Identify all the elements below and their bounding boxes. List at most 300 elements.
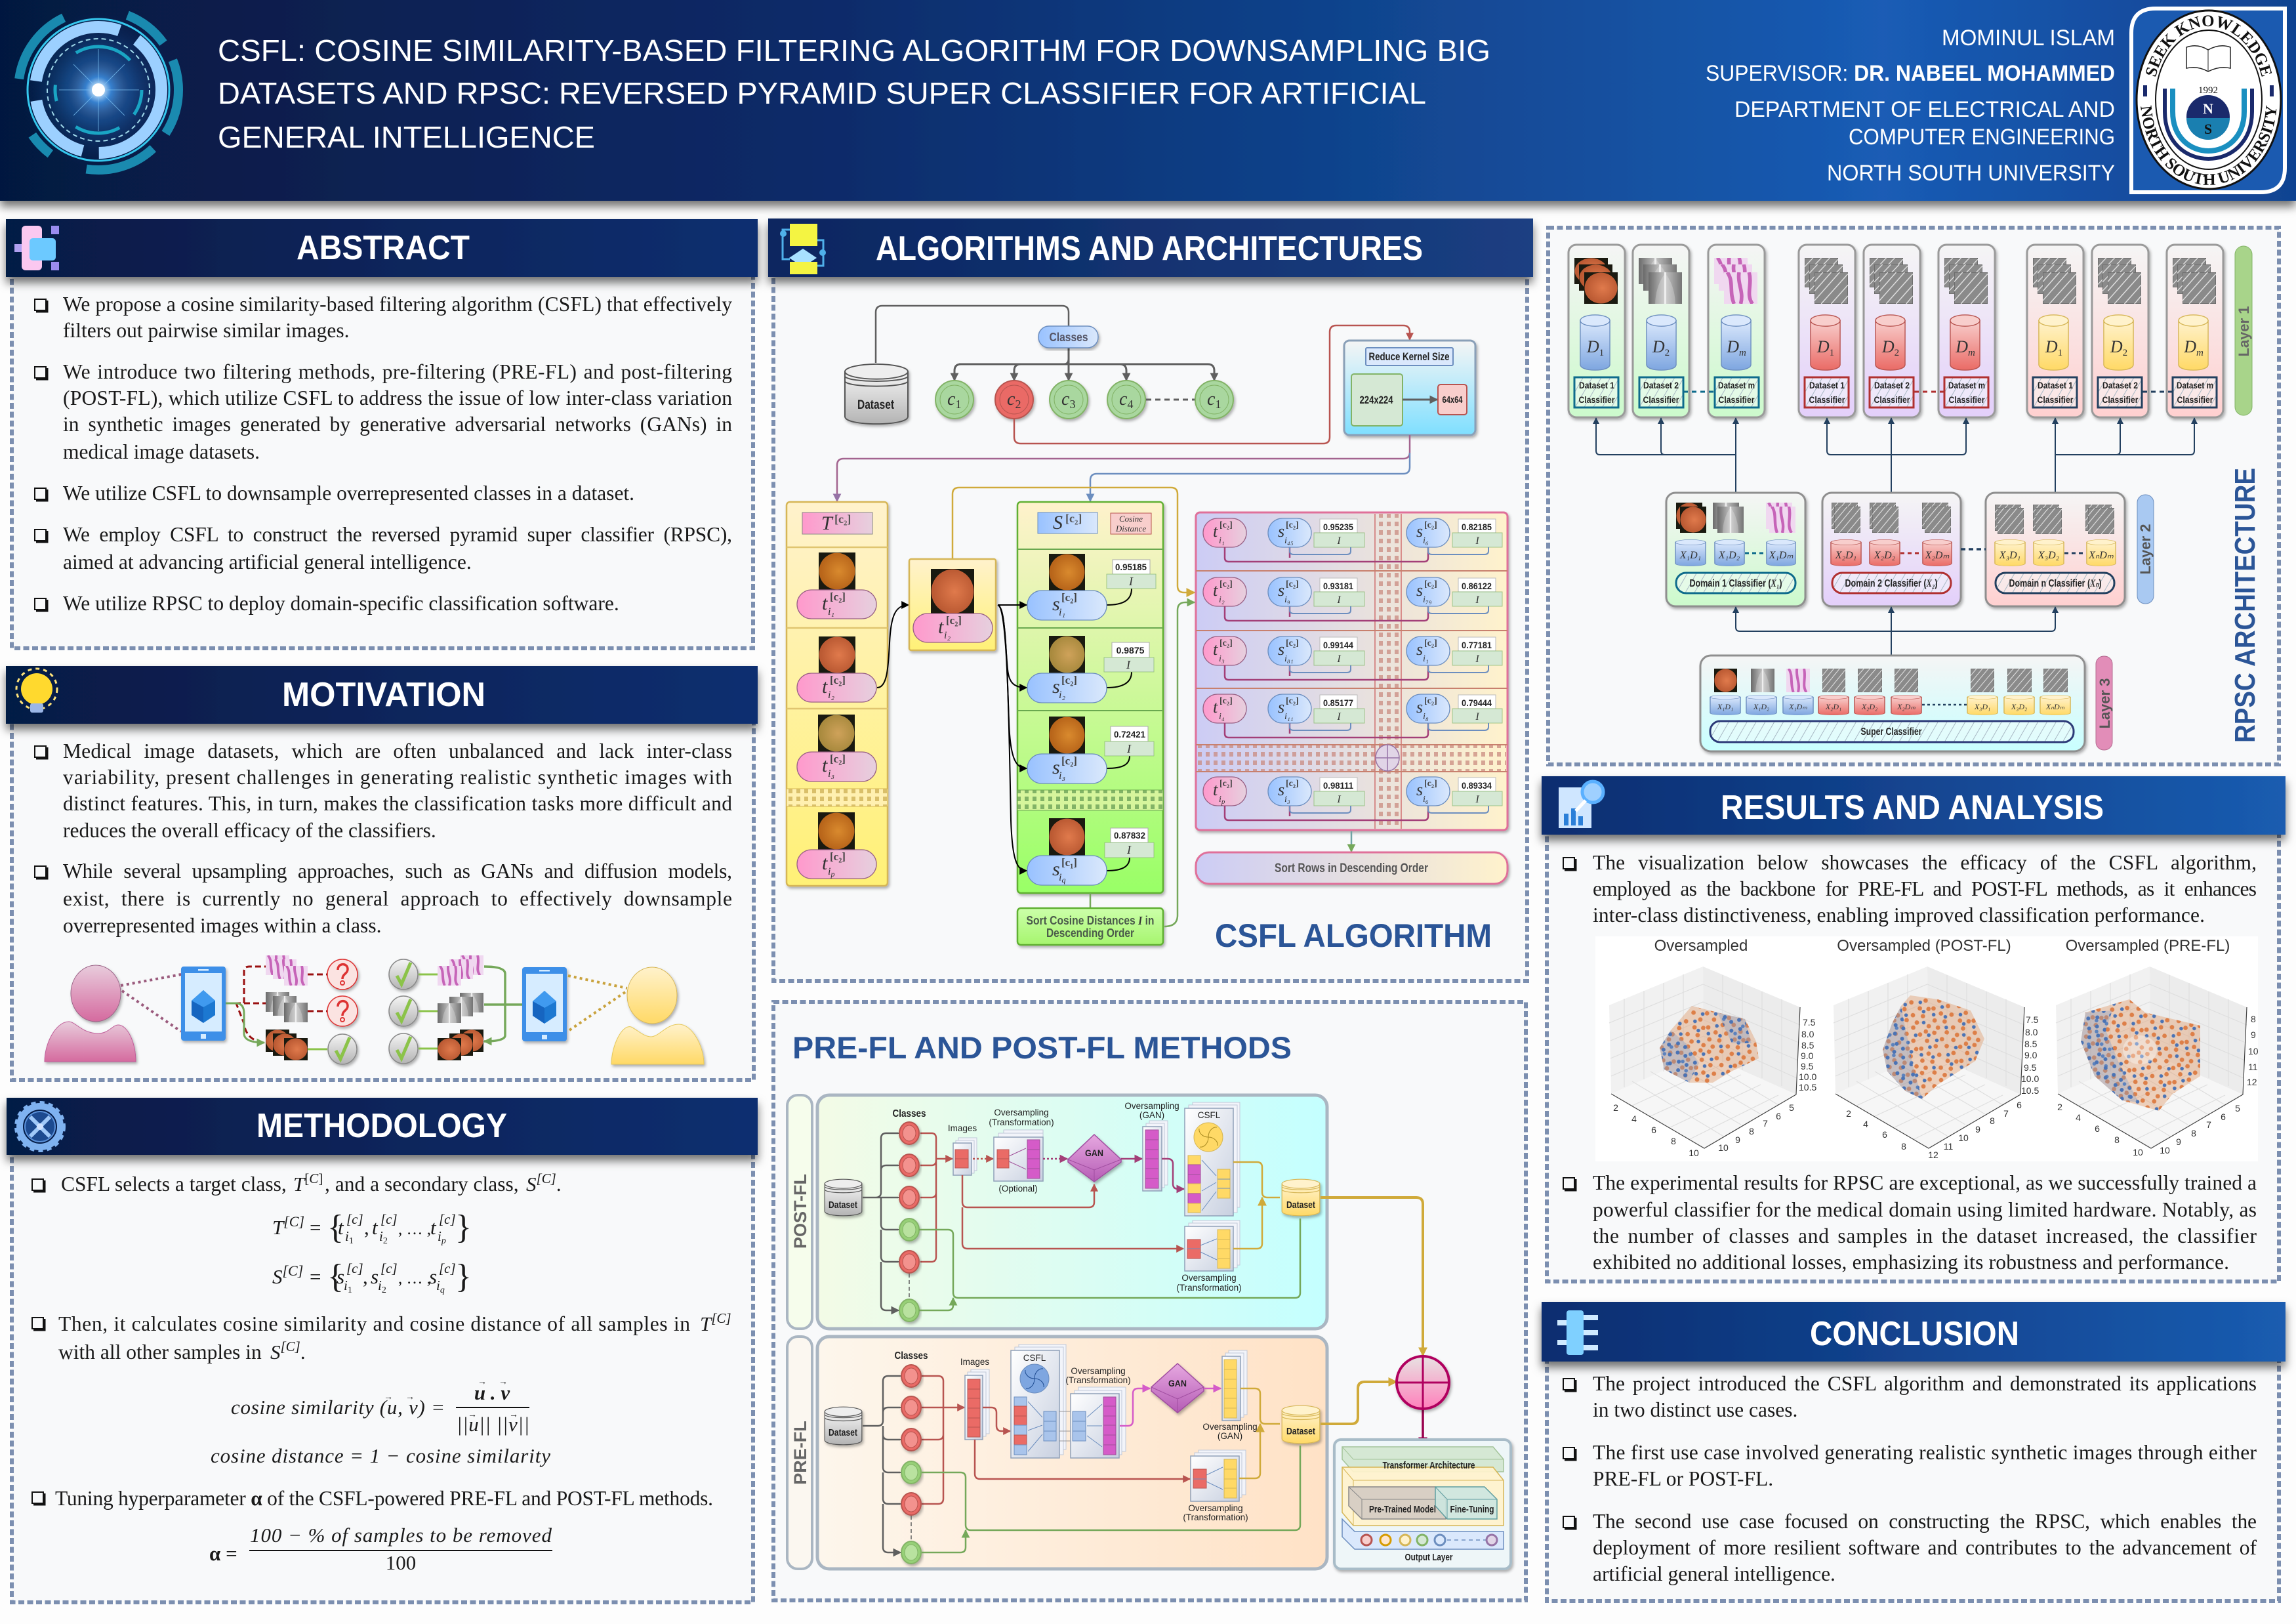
layer 1 column dataset 1 domain 1: Classifier [1578,394,1615,405]
layer 1 columns domain 2: 1 [1830,348,1834,358]
table row 1: [c₂] [1424,520,1437,530]
class nodes: c [1207,389,1215,409]
formula: target set: 1 [349,1236,354,1246]
title: DATASETS AND RPSC: REVERSED PYRAMID SUPER CLASSIFIER FOR ARTIFICIAL [218,76,1426,110]
text: bullet cosine calculation: . [300,1341,306,1364]
table row 5: s [1278,780,1284,799]
layer 2 domain 2: X₂Dₘ [1925,550,1949,561]
transformer architecture box: Transformer Architecture [1383,1460,1475,1471]
plot: oversampled: 8 [1671,1136,1676,1146]
table row 3: i₃ [1219,654,1225,664]
dataset output: Dataset [1286,1199,1315,1211]
text: bullet target class: CSFL selects a target class, [61,1173,287,1196]
selected target sample: t [938,616,944,638]
side label: PRE-FL: PRE-FL [790,1421,810,1485]
heading: methodology: METHODOLOGY [256,1107,507,1145]
formula: secondary set: i [436,1278,440,1293]
text: results experimental: exhibited no additional losses, emphasizing its robustness and performance. [1593,1251,2229,1274]
oversampling GAN stack: (GAN) [1218,1431,1242,1441]
icon: light bulb [16,669,57,713]
label: layer 1: Layer 1 [2236,306,2252,357]
layer 1 column dataset 2 domain 1: 2 [1665,348,1670,358]
formula: cosine similarity: → [384,1392,393,1402]
heading: abstract: ABSTRACT [297,229,470,267]
plot: oversampled PRE-FL: 10 [2133,1147,2143,1157]
connectors: layer 3 to layer 2 [1736,607,2055,655]
formula: target set: [C] [283,1213,304,1230]
column: target class T: [c₂] [830,591,846,603]
formula: secondary set: i [344,1278,348,1293]
column: target class T: i₃ [828,768,834,780]
oversampling transformation optional [989,1108,1054,1194]
formula: secondary set: [c] [346,1260,363,1276]
label: CSFL algorithm: CSFL ALGORITHM [1215,917,1492,954]
layer 1 columns domain n: Classifier [2177,394,2213,405]
table row 3: i₁ [1423,654,1429,664]
plot: oversampled: 5 [1789,1102,1794,1113]
text: bullet cosine calculation: [C] [711,1310,731,1326]
fine tuning [1435,1487,1497,1519]
images stack [948,1123,977,1175]
table row 2: 0.86122 [1462,581,1492,591]
label: layer 3 [2096,656,2113,750]
formula: secondary set [272,1258,472,1295]
formula: target set: 2 [383,1236,388,1246]
formula: alpha: 100 [386,1551,416,1574]
layer 1 columns domain n: D [2184,337,2196,356]
layer 1 columns domain n: D [2110,337,2123,356]
selected target sample: i₂ [944,630,951,641]
CSFL box: CSFL [1023,1353,1046,1363]
table row 1: t [1213,522,1218,541]
table of sorted distances [1196,512,1507,830]
heading: results and analysis [1542,776,2286,835]
table row 1: [c₂] [1286,520,1299,530]
text: bullet cosine calculation: Then, it calculates cosine similarity and cosine distance of all samples in [58,1312,690,1335]
label: layer 2: Layer 2 [2137,524,2154,575]
table row 3: s [1416,640,1423,659]
S rows: [c₂] [1061,674,1077,686]
table row 3 [1203,636,1502,680]
text: conclusion bullets: in two distinct use cases. [1593,1398,1797,1421]
oversampling transformation optional: (Transformation) [989,1117,1054,1127]
arrow: sort box to table [1164,602,1195,927]
table row 2: 0.93181 [1323,581,1353,591]
text: abstract bullets: filters out pairwise similar images. [63,319,350,342]
S rows: 0.87832 [1114,830,1145,841]
S rows: q [1061,875,1065,885]
plot: oversampled POST-FL: 8.0 [2025,1027,2038,1037]
plot: oversampled PRE-FL: 12 [2247,1077,2257,1087]
layer 2 domain 2: Domain 2 Classifier (X₂) [1845,578,1938,589]
oversampling transformation: Oversampling [1181,1273,1237,1283]
layer 3 super classifier: XₙDₘ [2045,702,2065,711]
class nodes: 1 [955,398,961,411]
layer 1 columns domain n: 1 [2058,348,2062,358]
oversampling GAN stack [1124,1101,1179,1191]
table row 4: [c₂] [1286,696,1299,706]
dataset gray: Dataset [829,1427,857,1438]
table row 4: [c₂] [1424,696,1437,706]
title: CSFL: COSINE SIMILARITY-BASED FILTERING ALGORITHM FOR DOWNSAMPLING BIG [218,33,1490,68]
plot: oversampled POST-FL: 11 [1944,1141,1953,1152]
plot: oversampled PRE-FL: 6 [2221,1112,2226,1122]
layer 2 domain 1: X₁Dₘ [1769,550,1793,561]
icon: university seal: NORTH SOUTH UNIVERSITY [2141,105,2276,185]
formula: cosine similarity: → [499,1377,508,1387]
layer 2 domain 2: X₂D₂ [1874,550,1896,561]
reduce kernel box: Reduce Kernel Size [1368,350,1450,363]
layer 3 super classifier: X₃D₁ [1974,702,1990,711]
sort cosine distances box: Descending Order [1046,927,1134,940]
formula: secondary set: s [429,1265,437,1288]
formula: alpha [209,1524,552,1574]
class nodes: 1 [1215,398,1221,411]
arrow: table to sort rows [1351,831,1352,852]
layer 1 columns domain n: Classifier [2102,394,2139,405]
heading: motivation [6,666,758,724]
plot: oversampled POST-FL: 4 [1863,1119,1868,1129]
text: bullet alpha: Tuning hyperparameter α of the CSFL-powered PRE-FL and POST-FL methods. [55,1487,713,1510]
plot: oversampled: 7 [1763,1118,1768,1129]
arrows: dataset to merge [1321,1197,1423,1446]
formula: secondary set: , … , [398,1270,431,1287]
text: bullet target class [32,1171,562,1196]
layer 3 super classifier [1700,656,2085,751]
table row 5: i₆ [1423,795,1429,804]
text: results experimental: The experimental results for RPSC are exceptional, as we successfully trained a [1593,1171,2257,1194]
text: conclusion bullets [1563,1372,2257,1585]
table row 4: [c₂] [1220,696,1233,706]
table row 2: t [1213,581,1218,600]
panel: methodology [7,1098,758,1602]
text: conclusion bullets: PRE-FL or POST-FL. [1593,1467,1773,1490]
connectors: layer 2 to layer 1 [1596,418,2194,493]
dataset cylinder [845,364,908,424]
heading: methods: PRE-FL AND POST-FL METHODS [792,1030,1292,1065]
table row 3: I [1475,654,1479,665]
formula: cosine distance: cosine distance = 1 − cosine similarity [211,1444,550,1467]
heading: results and analysis: RESULTS AND ANALYSIS [1721,789,2104,827]
plot: oversampled: 10 [1718,1142,1729,1153]
column: target class T: t [822,852,828,874]
plot: oversampled PRE-FL: 2 [2057,1102,2062,1112]
text: abstract bullets: aimed at advancing artificial general intelligence. [63,551,472,573]
column: target class T: t [822,755,828,776]
formula: secondary set: = [310,1265,321,1288]
oversampling GAN stack: Oversampling [1124,1101,1179,1111]
S header: S [1053,512,1063,533]
formula: cosine similarity: → [478,1377,487,1387]
heading: algorithms and architectures: ALGORITHMS AND ARCHITECTURES [876,230,1423,268]
S rows: [c₂] [1061,755,1077,767]
S rows: i₂ [1059,690,1065,701]
text: motivation bullets: exist, there is currently no general approach to effectively downsample [63,887,732,910]
header banner [0,0,2296,214]
heading: methodology [7,1098,758,1155]
plot: oversampled: 10.5 [1799,1082,1816,1093]
formula: secondary set: s [371,1265,379,1288]
icon: glowing circular tech emblem [18,10,178,170]
reduce kernel box [1344,341,1475,435]
icon: left user [45,965,136,1062]
label: layer 2 [2137,495,2154,604]
column: target class T: [c₂] [830,850,846,863]
text: motivation bullets: overrepresented images within a class. [63,914,381,937]
icon: flowchart [780,224,826,274]
layer 1 column dataset 1 domain 1 [1568,245,1625,417]
table row 2: s [1278,581,1284,600]
table row 1: I [1475,535,1479,547]
plot: oversampled POST-FL: 10.0 [2021,1073,2039,1084]
icon: university seal: S [2204,121,2212,137]
plot: oversampled: 9.0 [1801,1051,1814,1061]
table row 5: 0.89334 [1462,780,1492,791]
text: bullet target class: T [293,1173,304,1196]
plot: oversampled PRE-FL: 9 [2251,1030,2256,1040]
S rows: I [1126,742,1132,755]
S rows: s [1052,858,1060,880]
table row 4: i₁₁ [1284,712,1294,722]
formula: secondary set: { [327,1258,344,1295]
plot: oversampled POST-FL: 9.5 [2024,1062,2037,1073]
table row 5: [c₂] [1220,779,1233,789]
plot: oversampled PRE-FL: 10 [2248,1046,2259,1056]
GAN [1151,1364,1204,1413]
text: abstract bullets: in synthetic images generated by generative adversarial networks (GANs) in [63,413,732,436]
panel: PRE-FL and POST-FL methods [773,1002,1526,1600]
class nodes [935,381,1233,419]
reduce kernel box: 224x224 [1359,394,1393,406]
table row 3: [c₂] [1424,638,1437,648]
icon: university seal [2129,7,2287,194]
heading: conclusion: CONCLUSION [1810,1315,2019,1353]
text: conclusion bullets: The project introduced the CSFL algorithm and demonstrated its applications [1593,1372,2257,1395]
layer 1 column dataset m domain 1: Dataset m [1718,380,1755,390]
class nodes [901,1365,921,1564]
formula: secondary set: i [378,1278,382,1293]
formula: secondary set: 1 [348,1285,352,1295]
column: target class T: [c₂] [830,674,846,686]
layer 3 super classifier: X₁D₂ [1753,702,1769,711]
images stack: Images [960,1357,989,1367]
table row 2: s [1416,581,1423,600]
layer 3 super classifier: Super Classifier [1860,726,1922,738]
formula: target set [272,1209,472,1246]
formula: secondary set: , [363,1265,368,1288]
column: target class T: p [830,869,834,879]
text: results experimental: powerful classifier for the medical domain using limited hardware. Notably, as [1593,1198,2257,1221]
plot: oversampled PRE-FL: 6 [2095,1123,2100,1134]
table row 5: i₃ [1284,795,1290,804]
plot: oversampled: 9.5 [1801,1061,1814,1072]
plot: oversampled POST-FL: 6 [2017,1100,2022,1110]
class nodes: 2 [1015,398,1021,411]
text: motivation bullets: distinct features. This, in turn, makes the classification tasks more difficult and [63,792,732,815]
text: bullet cosine calculation: S [270,1341,281,1364]
formula: cosine similarity: ||u|| ||v|| [457,1413,529,1436]
plot: oversampled PRE-FL: 8 [2191,1128,2196,1138]
layer 2 domain 1: Domain 1 Classifier (X₁) [1690,578,1782,589]
layer 1 column dataset 2 domain 1: D [1652,337,1665,356]
table row 1 [1203,518,1502,562]
plot: oversampled PRE-FL: 8 [2251,1014,2256,1024]
plot: oversampled PRE-FL: 7 [2206,1119,2211,1130]
dataset output [1282,1405,1320,1444]
table row 4: I [1475,711,1479,722]
table row 3: t [1213,640,1218,659]
formula: target set: p [441,1236,446,1246]
column: target class T: t [822,593,828,614]
table row 5 [1203,777,1502,820]
layer 1 column dataset m domain 1: m [1739,348,1746,358]
S rows: i₁ [1059,607,1065,618]
layer 1 columns domain 2: Dataset m [1948,380,1985,390]
CSFL box [1011,1344,1066,1458]
POST-FL flow: Classes [892,1108,926,1119]
oversampling transformation bottom: Oversampling [1188,1503,1243,1513]
table row 5: s [1416,780,1423,799]
dataset gray [825,1407,862,1445]
title: GENERAL INTELLIGENCE [218,120,595,154]
formula: target set: = [310,1216,321,1239]
plot: oversampled POST-FL: 9.0 [2024,1050,2038,1060]
formula: target set: , [364,1216,369,1239]
heading: abstract [6,219,758,277]
table row 4: i₄ [1219,712,1225,722]
column: target class T: [c₂] [830,753,846,765]
cosine distance header: Distance [1115,524,1146,533]
table row 5: i [1219,795,1221,804]
S rows: 0.72421 [1114,729,1145,739]
oversampling transformation optional: (Optional) [998,1184,1038,1194]
output layer [1342,1519,1504,1563]
label: layer 1 [2235,246,2252,415]
class nodes [899,1122,919,1322]
table row 2: i₇₉ [1423,595,1432,605]
T header [802,512,872,534]
table row 2: I [1475,594,1479,606]
text: results intro [1563,851,2257,927]
plot: oversampled POST-FL: Oversampled (POST-FL) [1837,937,2011,955]
text: bullet cosine calculation: [C] [281,1339,300,1354]
text: motivation bullets: While several upsampling approaches, such as GANs and diffusion models, [63,860,732,883]
plot: oversampled POST-FL: 9 [1975,1124,1980,1135]
formula: secondary set: [c] [439,1260,456,1276]
layer 2 domain n: X₃D₁ [1999,550,2020,561]
chart: 3D scatter plots [1595,936,2259,1161]
author block: COMPUTER ENGINEERING [1849,125,2115,150]
S rows: I [1126,658,1131,671]
S rows: s [1052,676,1060,697]
text: abstract bullets: We introduce two filtering methods, pre-filtering (PRE-FL) and post-filtering [63,360,732,383]
formula: target set: i [438,1228,441,1244]
layer 1 columns domain 2: Dataset 2 [1874,380,1910,390]
plot: oversampled [1609,937,1816,1158]
author block [1706,26,2115,186]
plot: oversampled PRE-FL: Oversampled (PRE-FL) [2066,937,2230,955]
plot: oversampled: 8 [1749,1126,1754,1136]
class nodes: c [1119,389,1127,409]
plot: oversampled POST-FL: 7 [2003,1108,2009,1119]
oversampling transformation: (Transformation) [1065,1375,1131,1385]
class nodes: 4 [1127,398,1133,411]
layer 1 columns domain 2: D [1882,337,1895,356]
icon: right user [611,967,704,1064]
layer 2 domain 2 [1822,493,1961,606]
S rows: s [1052,757,1060,778]
oversampling transformation: Oversampling [1071,1366,1126,1376]
illustration: users and classifier apps [45,955,704,1064]
text: results intro: inter-class distinctiveness, enabling improved classification performance. [1593,904,2205,927]
layer 2 domain n: Domain n Classifier (Xₙ) [2009,578,2102,589]
table row 4: t [1213,697,1218,717]
dataset gray [825,1179,862,1216]
oversampling transformation optional: Oversampling [994,1108,1049,1117]
plot: oversampled: 4 [1631,1114,1637,1124]
label: layer 3: Layer 3 [2097,678,2113,729]
CSFL box: CSFL [1198,1110,1221,1120]
sort rows pill: Sort Rows in Descending Order [1275,862,1428,875]
column: target class T: i [828,866,830,877]
author block: SUPERVISOR: DR. NABEEL MOHAMMED [1706,61,2115,86]
text: bullet cosine calculation: T [700,1312,711,1335]
plot: oversampled POST-FL: 10.5 [2021,1085,2039,1096]
cosine distance header [1111,513,1151,534]
text: conclusion bullets: artificial general intelligence. [1593,1562,1835,1585]
plot: oversampled POST-FL: 6 [1882,1129,1887,1140]
S rows: s [1052,593,1060,615]
title [218,33,1490,154]
table row 5: [c₂] [1424,779,1437,789]
formula: target set: T [272,1216,283,1239]
merge node [1397,1356,1449,1409]
icon: conclusion blocks [1557,1310,1598,1355]
plot: oversampled: Oversampled [1654,937,1748,955]
layer 1 column dataset 2 domain 1: Dataset 2 [1643,380,1679,390]
layer 3 super classifier: X₃D₂ [2011,702,2027,711]
oversampling GAN stack [1202,1350,1258,1441]
status icons [327,959,418,1064]
text: bullet target class: S [526,1173,537,1196]
panel: conclusion [1542,1302,2286,1601]
output layer: Output Layer [1405,1552,1453,1563]
POST-FL flow [817,1095,1327,1329]
table row 3: i₈₁ [1284,654,1294,664]
side label: PRE-FL [787,1337,812,1569]
layer 1 columns domain 2: Classifier [1809,394,1845,405]
label: RPSC architecture: RPSC ARCHITECTURE [2229,468,2261,743]
table row 3: 0.77181 [1462,640,1492,650]
plot: oversampled PRE-FL: 11 [2248,1062,2258,1072]
transformer architecture box [1334,1440,1511,1569]
icon: university seal: SEEK KNOWLEDGE [2146,15,2272,77]
S rows: I [1126,843,1132,856]
text: abstract bullets: We propose a cosine similarity-based filtering algorithm (CSFL) that effectively [63,293,732,316]
layer 1 column dataset m domain 1 [1708,245,1765,417]
layer 1 columns domain n: Classifier [2038,394,2074,405]
table row 3: [c₂] [1286,638,1299,648]
oversampling transformation [1059,1366,1131,1458]
text: conclusion bullets: deployment of more resilient software and contributes to the advancement of [1593,1536,2257,1559]
reduce kernel box: 64x64 [1442,394,1463,406]
S header: [c₂] [1065,512,1082,525]
formula: target set: t [372,1216,379,1239]
fine tuning: Fine-Tuning [1450,1504,1494,1515]
table row 1: i₁ [1219,536,1225,546]
table row 1: i₆ [1423,536,1429,546]
formula: target set: { [327,1209,344,1246]
